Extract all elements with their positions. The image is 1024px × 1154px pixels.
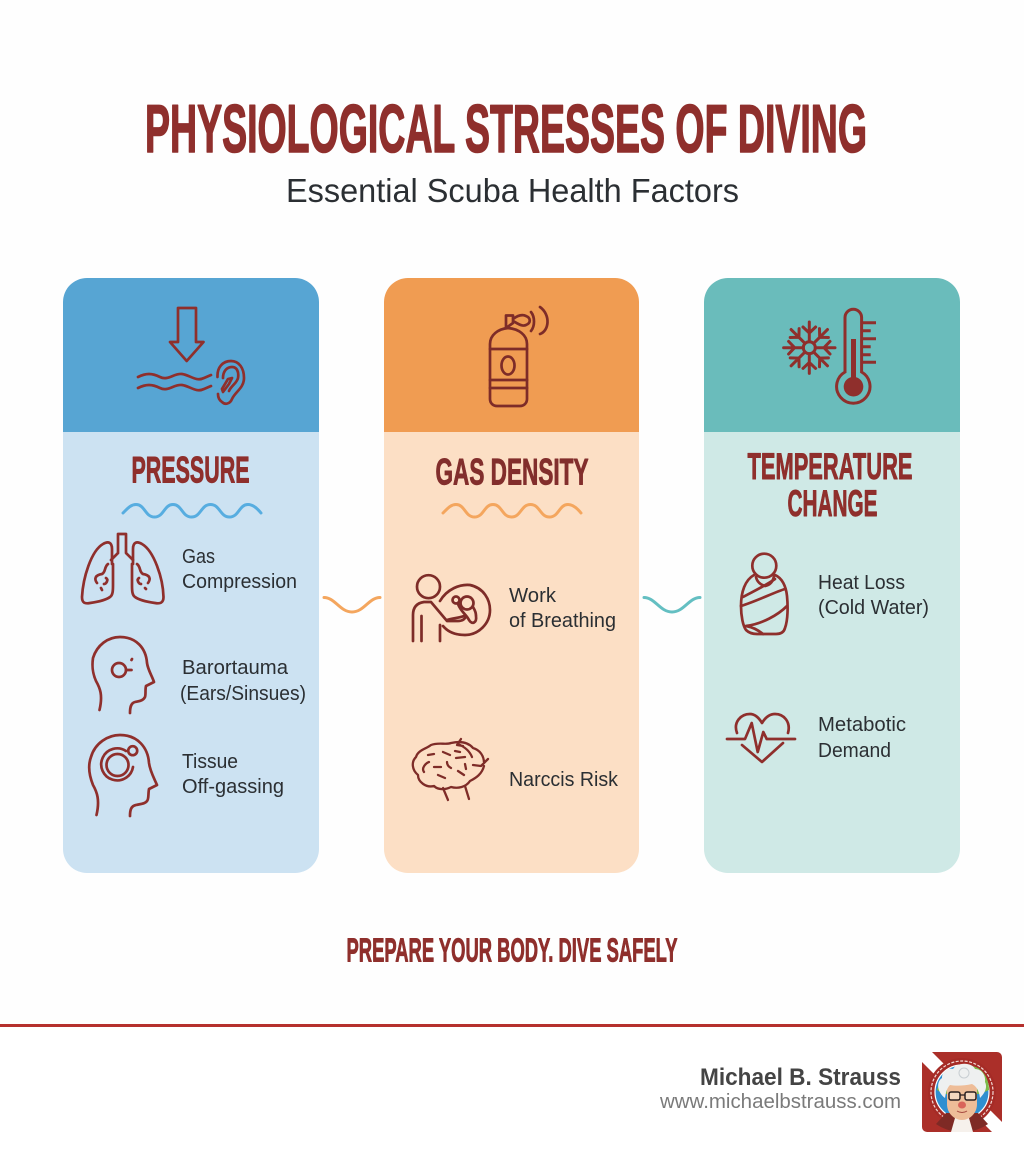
heading: gas density: GAS DENSITY [436, 452, 589, 492]
author name: Michael B. Strauss [700, 1064, 901, 1091]
label: heat loss: (Cold Water) [818, 597, 929, 619]
icon: scuba tank [490, 307, 548, 406]
icon: lungs [82, 534, 164, 603]
icon: snowflake [784, 322, 835, 373]
wave divider: gas density [443, 504, 581, 517]
label: tissue off-gassing: Off-gassing [182, 776, 284, 798]
heading: temperature change: TEMPERATURE [748, 446, 912, 487]
icon: head with sinus [92, 637, 154, 713]
footer divider [0, 1024, 1024, 1027]
label: metabolic demand: Metabotic [818, 714, 906, 736]
footer [0, 1027, 1024, 1154]
item: tissue off-gassing [89, 735, 284, 816]
icon: wrapped body [741, 554, 788, 634]
item: narcosis risk [413, 739, 619, 800]
icon: heart with pulse [727, 714, 795, 762]
label: metabolic demand: Demand [818, 740, 891, 762]
icon: person with lungs circle [413, 575, 490, 641]
subtitle: Essential Scuba Health Factors [286, 172, 739, 209]
icon: brain [413, 739, 488, 800]
icon: thermometer [837, 309, 876, 403]
heading: temperature change: CHANGE [788, 483, 878, 524]
panel: pressure [63, 278, 319, 873]
item: work of breathing [413, 575, 616, 641]
icon: pressure arrow, waves and ear [138, 308, 244, 404]
label: work of breathing: Work [509, 585, 557, 607]
item: barotrauma [92, 637, 306, 713]
label: tissue off-gassing: Tissue [182, 751, 238, 773]
website: www.michaelbstrauss.com [659, 1091, 901, 1113]
label: gas compression: Compression [182, 571, 297, 593]
label: work of breathing: of Breathing [509, 610, 616, 632]
tagline: PREPARE YOUR BODY. DIVE SAFELY [346, 932, 678, 968]
label: gas compression: Gas [182, 546, 215, 568]
connector: teal wave [644, 598, 700, 612]
label: narcosis risk: Narccis Risk [509, 769, 619, 791]
icon: head with circles [89, 735, 157, 816]
item: heat loss [741, 554, 929, 634]
item: metabolic demand [727, 714, 906, 762]
panel: temperature change [704, 278, 960, 873]
logo: author portrait badge [922, 1052, 1002, 1132]
label: barotrauma: (Ears/Sinsues) [180, 683, 306, 705]
label: heat loss: Heat Loss [818, 572, 905, 594]
label: barotrauma: Barortauma [182, 657, 289, 679]
connector: orange wave [324, 598, 380, 612]
panel: gas density [384, 278, 639, 873]
item: gas compression [82, 534, 297, 603]
wave divider: pressure [123, 504, 261, 517]
heading: pressure: PRESSURE [132, 450, 250, 490]
